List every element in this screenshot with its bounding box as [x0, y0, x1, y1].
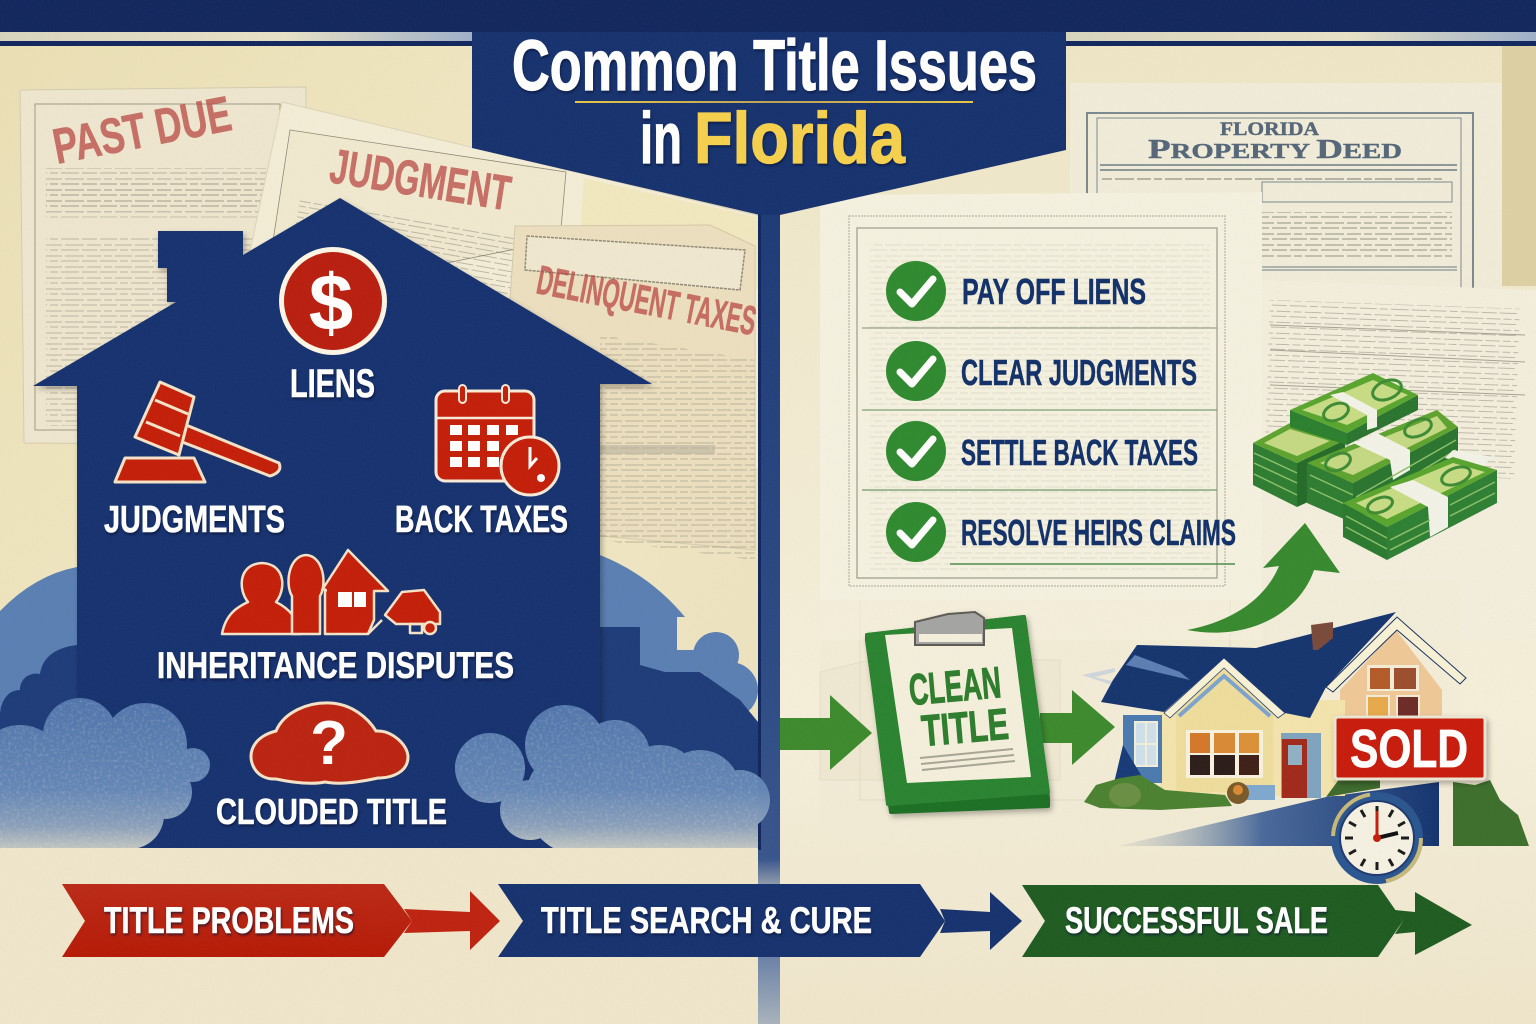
light clouds left — [0, 698, 210, 850]
side wall blue — [1123, 715, 1162, 783]
panel: checklist — [820, 192, 1262, 640]
arrow: curved up to money — [1187, 523, 1340, 633]
icon: money stacks — [1253, 373, 1497, 560]
title: in florida: in — [640, 99, 682, 179]
arrow: red — [404, 891, 500, 950]
arrow: into clean title — [780, 695, 872, 770]
shrubs — [1084, 775, 1232, 810]
check item: settle back taxes: SETTLE BACK TAXES — [961, 432, 1198, 473]
bush right — [1453, 780, 1529, 846]
icon: clouded title: ? — [310, 709, 348, 778]
sign post — [1440, 778, 1453, 846]
porch step — [1230, 785, 1275, 800]
tan corner of background — [1502, 46, 1536, 286]
label: inheritance disputes: INHERITANCE DISPUTES — [157, 645, 514, 686]
arrow: blue — [940, 892, 1022, 950]
document: faded paper behind clean title — [820, 580, 1460, 840]
navy triangle tree — [1110, 745, 1147, 800]
check item: settle back taxes — [886, 421, 1198, 481]
label: judgments: JUDGMENTS — [104, 499, 285, 541]
deed title — [1148, 119, 1402, 164]
stamp: past due: PAST DUE — [48, 85, 236, 175]
clipboard text: clean title: TITLE — [920, 700, 1011, 756]
stamp: judgment: JUDGMENT — [326, 140, 515, 221]
check item: clear judgments: CLEAR JUDGMENTS — [961, 352, 1197, 393]
background: right parchment — [770, 0, 1536, 1024]
banner: successful sale: SUCCESSFUL SALE — [1065, 900, 1328, 941]
document: judgment — [248, 102, 760, 470]
motion streaks — [1082, 668, 1115, 686]
money stack: top — [1290, 373, 1418, 445]
document: past due — [20, 85, 306, 445]
icon: sold sign: SOLD — [1350, 719, 1468, 779]
check item: clear judgments — [886, 341, 1197, 401]
light clouds right — [455, 705, 770, 855]
icon: clouded title — [251, 703, 408, 783]
document: delinquent taxes — [510, 225, 760, 560]
clipboard text: clean title: CLEAN — [907, 658, 1003, 715]
cloud speckle — [0, 700, 758, 849]
banner: title search and cure: TITLE SEARCH & CURE — [541, 900, 872, 941]
background skyline domes — [0, 555, 758, 720]
center divider — [758, 200, 780, 1024]
document: behind money — [1262, 280, 1536, 640]
chimney — [1311, 622, 1333, 650]
background: left parchment — [0, 0, 770, 1024]
label: back taxes: BACK TAXES — [395, 499, 568, 541]
header rule right — [1066, 32, 1536, 46]
banner: title search and cure — [498, 884, 945, 957]
right gable wall — [1340, 630, 1442, 730]
arrow: clean title to house — [1040, 690, 1115, 765]
right gable trim — [1326, 617, 1466, 692]
upper window — [1367, 665, 1419, 691]
door — [1281, 733, 1321, 798]
money stack: front — [1343, 450, 1497, 560]
banner: title problems — [62, 884, 412, 957]
label: clouded title: CLOUDED TITLE — [216, 791, 447, 832]
middle wall — [1160, 700, 1345, 796]
check item: resolve heirs claims: RESOLVE HEIRS CLAIMS — [961, 512, 1236, 553]
title: common title issues: Common Title Issues — [512, 27, 1037, 106]
check item: resolve heirs claims — [886, 502, 1236, 562]
check item: pay off liens: PAY OFF LIENS — [962, 271, 1146, 312]
banner: successful sale — [1022, 885, 1403, 957]
stamp: delinquent taxes: DELINQUENT TAXES — [533, 257, 760, 344]
title banner — [472, 27, 1066, 215]
icon: clean title clipboard — [867, 612, 1048, 812]
money stack: back left — [1253, 423, 1345, 507]
bush by sign — [1326, 778, 1380, 797]
icon: inheritance dispute — [222, 550, 440, 634]
clip — [915, 612, 984, 645]
front gable — [1176, 668, 1273, 792]
check item: pay off liens — [886, 261, 1146, 321]
header rule left — [0, 32, 472, 46]
navy wedge ground — [1118, 782, 1439, 846]
top navy band — [0, 0, 1536, 32]
icon: dollar circle — [279, 247, 387, 355]
roof — [1101, 612, 1396, 718]
house silhouette panel — [33, 198, 652, 848]
icon: clock — [1331, 792, 1423, 884]
lower windows — [1367, 696, 1419, 722]
light paper corner behind delinquent taxes — [580, 178, 760, 290]
money stack: middle — [1307, 410, 1458, 523]
front window — [1186, 730, 1263, 778]
bottom band — [0, 848, 758, 1024]
icon: gavel — [115, 382, 280, 482]
dark clouds behind — [0, 627, 758, 800]
clipboard text: clean title — [907, 658, 1011, 757]
document: florida property deed — [1070, 83, 1502, 300]
title: in florida: Florida — [694, 99, 906, 179]
label: liens: LIENS — [290, 362, 375, 406]
deed title: P ROPERTY D EED — [1148, 134, 1402, 164]
arrow: green — [1395, 892, 1472, 955]
deed title: FLORIDA — [1220, 119, 1319, 140]
banner: title problems: TITLE PROBLEMS — [104, 900, 354, 941]
title rule — [575, 101, 973, 103]
illustration: house — [1082, 612, 1466, 810]
icon: dollar circle: $ — [309, 258, 353, 347]
icon: calendar with clock — [436, 385, 559, 495]
